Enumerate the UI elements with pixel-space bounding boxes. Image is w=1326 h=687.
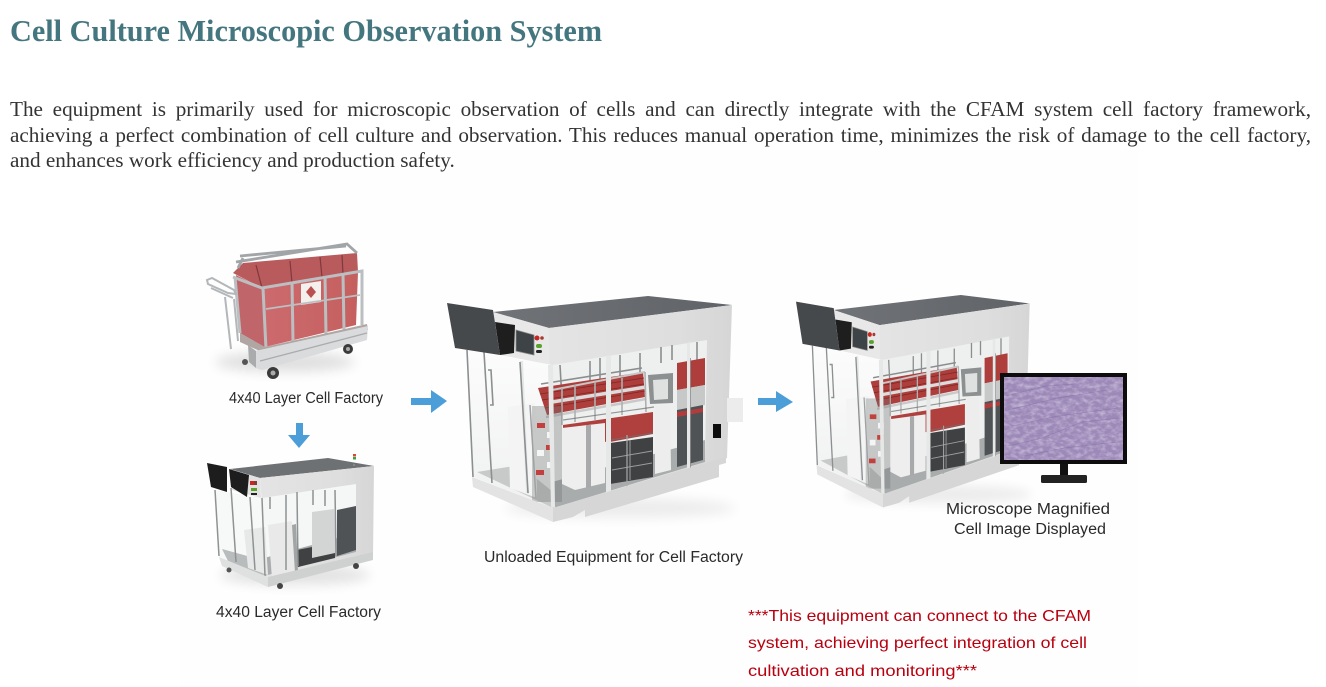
arrow: right to monitored equipment — [758, 391, 793, 412]
label: microscope display: Microscope Magnified — [946, 501, 1110, 518]
callout: red note: ***This equipment can connect to the CFAM — [748, 608, 1091, 625]
monitor: magnified cell image — [1000, 373, 1127, 483]
group: cart with cell factory — [207, 244, 368, 379]
callout: red note: cultivation and monitoring*** — [748, 663, 977, 680]
faint image background — [180, 150, 1138, 687]
intro paragraph: and enhances work efficiency and production safety. — [10, 148, 455, 172]
label: frame: 4x40 Layer Cell Factory — [216, 604, 381, 621]
callout: red note — [748, 608, 1091, 680]
equipment: with display — [796, 295, 1039, 507]
intro paragraph: The equipment is primarily used for microscopic observation of cells and can directly integrate with the CFAM system cell factory framework, — [10, 97, 1311, 121]
intro paragraph: achieving a perfect combination of cell culture and observation. This reduces manual operation time, minimizes the risk of damage to the cell factory, — [10, 122, 1311, 146]
title: Cell Culture Microscopic Observation System — [10, 14, 602, 48]
arrow: right to unloaded equipment — [411, 390, 447, 413]
callout: red note: system, achieving perfect integration of cell — [748, 635, 1087, 652]
intro paragraph — [10, 97, 1311, 172]
label: microscope display: Cell Image Displayed — [954, 521, 1106, 538]
equipment: small loaded frame — [207, 454, 374, 589]
label: microscope display — [946, 501, 1110, 538]
arrow: down — [288, 423, 310, 448]
equipment: unloaded — [447, 296, 743, 522]
label: unloaded equipment: Unloaded Equipment for Cell Factory — [484, 549, 743, 566]
label: cart: 4x40 Layer Cell Factory — [229, 390, 383, 407]
